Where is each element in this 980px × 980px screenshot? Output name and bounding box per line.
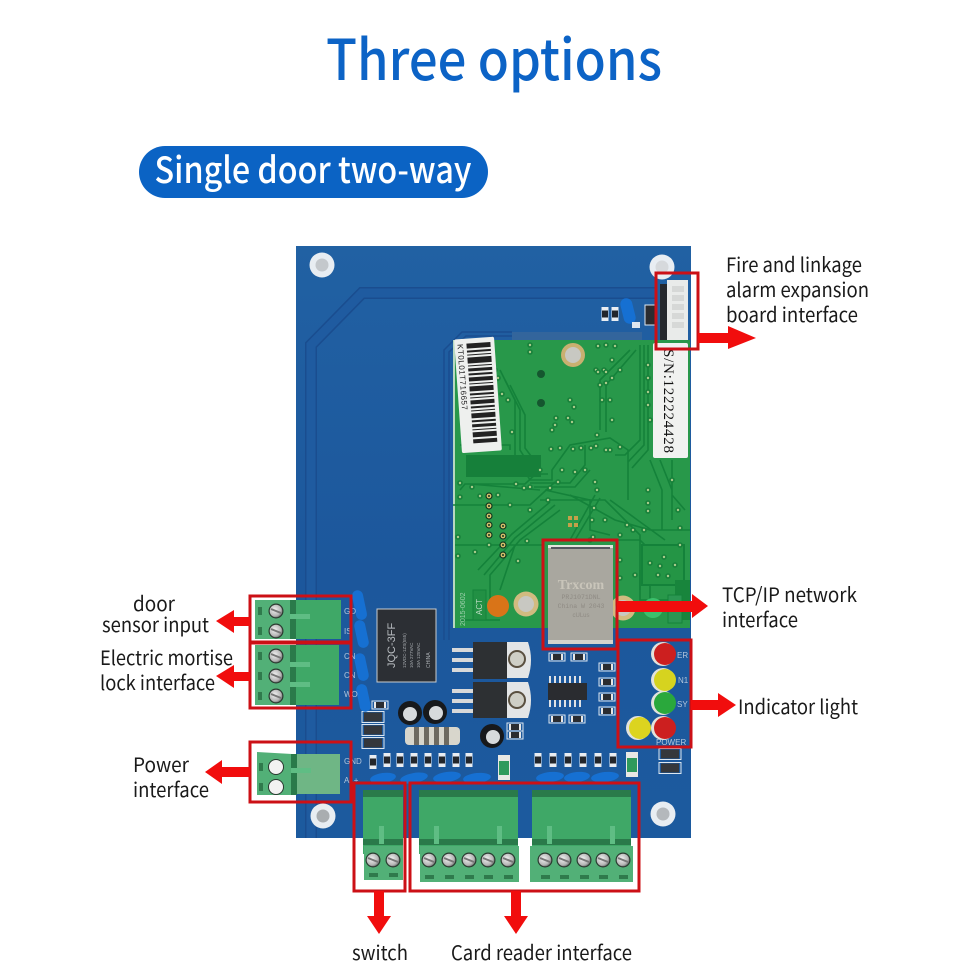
lower module parts	[460, 590, 682, 626]
fire alarm connector	[660, 280, 688, 340]
label: door sensor input: door	[133, 588, 175, 617]
silkscreen labels: GND	[344, 757, 362, 766]
logic chip	[548, 676, 587, 707]
arrow: power	[205, 760, 250, 784]
silkscreen labels: CN	[344, 671, 356, 680]
vias	[455, 342, 683, 581]
silkscreen labels: SY	[677, 700, 688, 709]
arrow: indicator	[691, 693, 736, 717]
ethernet jack	[548, 545, 613, 644]
red frame: switch	[354, 783, 405, 891]
red frame: card reader	[410, 783, 639, 891]
arrow: switch	[367, 891, 391, 934]
label: TCP/IP: interface	[722, 604, 798, 633]
relay	[377, 609, 436, 682]
terminal block: lock	[255, 645, 339, 705]
diodes	[362, 701, 681, 774]
green module	[453, 337, 690, 628]
lower module parts: 2015-0602	[460, 592, 467, 626]
terminal block: card reader 2	[530, 790, 633, 882]
serial label	[653, 343, 688, 458]
serial label: S/N:122224428	[660, 349, 676, 453]
arrow: TCP/IP	[617, 594, 708, 618]
small resistors	[370, 653, 616, 769]
section heading pill: Single door two-way	[154, 142, 472, 194]
arrow: fire interface	[698, 326, 756, 349]
label: switch: switch	[352, 937, 408, 966]
red frame: power	[250, 742, 351, 802]
label: door sensor input: sensor input	[102, 609, 209, 638]
terminal block: power	[257, 752, 340, 795]
relay: JQC-3FF	[386, 622, 398, 668]
label: fire and linkage: alarm expansion	[726, 274, 869, 303]
title: Three options	[326, 16, 662, 97]
label: power interface: Power	[133, 749, 189, 778]
board base	[296, 246, 691, 838]
indicator LEDs	[626, 642, 676, 740]
module screw	[561, 343, 585, 367]
ethernet jack: Trxcom	[558, 578, 605, 593]
label: indicator light: Indicator light	[738, 691, 858, 720]
terminal block: switch	[363, 790, 403, 880]
label: electric mortise lock: lock interface	[100, 667, 215, 696]
red frame: TCP/IP	[543, 540, 617, 649]
terminal block: card reader 1	[419, 790, 519, 882]
mounting holes	[310, 252, 676, 828]
silkscreen labels: A1+	[344, 776, 359, 785]
lower module parts: L	[670, 605, 675, 614]
ethernet jack: China W 2043	[558, 603, 605, 610]
silkscreen labels	[344, 607, 689, 785]
relay: CHINA	[426, 652, 432, 668]
relay: 10A 125VAC	[416, 642, 421, 668]
fuses	[498, 752, 638, 780]
label: power interface: interface	[133, 774, 209, 803]
label: electric mortise lock: Electric mortise	[100, 642, 233, 671]
capacitors and resistor	[398, 700, 504, 748]
red frame: lock	[250, 643, 351, 708]
ethernet jack: PRJ1071DNL	[561, 594, 601, 601]
silkscreen labels: N1	[678, 676, 689, 685]
voltage regulators	[452, 642, 531, 718]
top jumper parts	[602, 297, 655, 328]
arrow: card reader	[504, 891, 528, 934]
relay: 12VDC-1ZS(555)	[402, 633, 407, 668]
arrow: door sensor	[216, 610, 250, 633]
terminal block: door sensor	[255, 600, 341, 639]
arrow: lock	[216, 665, 250, 688]
header pads	[485, 492, 507, 559]
label: fire and linkage: Fire and linkage	[726, 249, 862, 278]
silkscreen labels: IS	[344, 627, 352, 636]
copper traces on board	[311, 293, 656, 838]
ethernet jack: cULus	[572, 613, 590, 619]
red frame: fire interface	[656, 273, 698, 349]
label: TCP/IP: TCP/IP network	[722, 579, 857, 608]
silkscreen labels: CN	[344, 652, 356, 661]
label: card reader interface: Card reader interface	[451, 937, 632, 966]
silkscreen labels: GD	[344, 607, 356, 616]
circuit board	[100, 246, 869, 966]
silkscreen labels: POWER	[656, 738, 686, 747]
barcode label: KT0L01T716657	[455, 344, 469, 411]
silkscreen labels: WO	[344, 690, 358, 699]
barcode label	[454, 337, 502, 453]
red frame: indicator	[618, 640, 691, 747]
label: fire and linkage: board interface	[726, 299, 858, 328]
silkscreen labels: ER	[677, 651, 688, 660]
lower module parts: ACT	[475, 599, 484, 615]
blue ceramic capacitors	[351, 589, 619, 785]
relay: 10A 277VAC	[409, 642, 414, 668]
red frame: door sensor	[250, 596, 351, 642]
